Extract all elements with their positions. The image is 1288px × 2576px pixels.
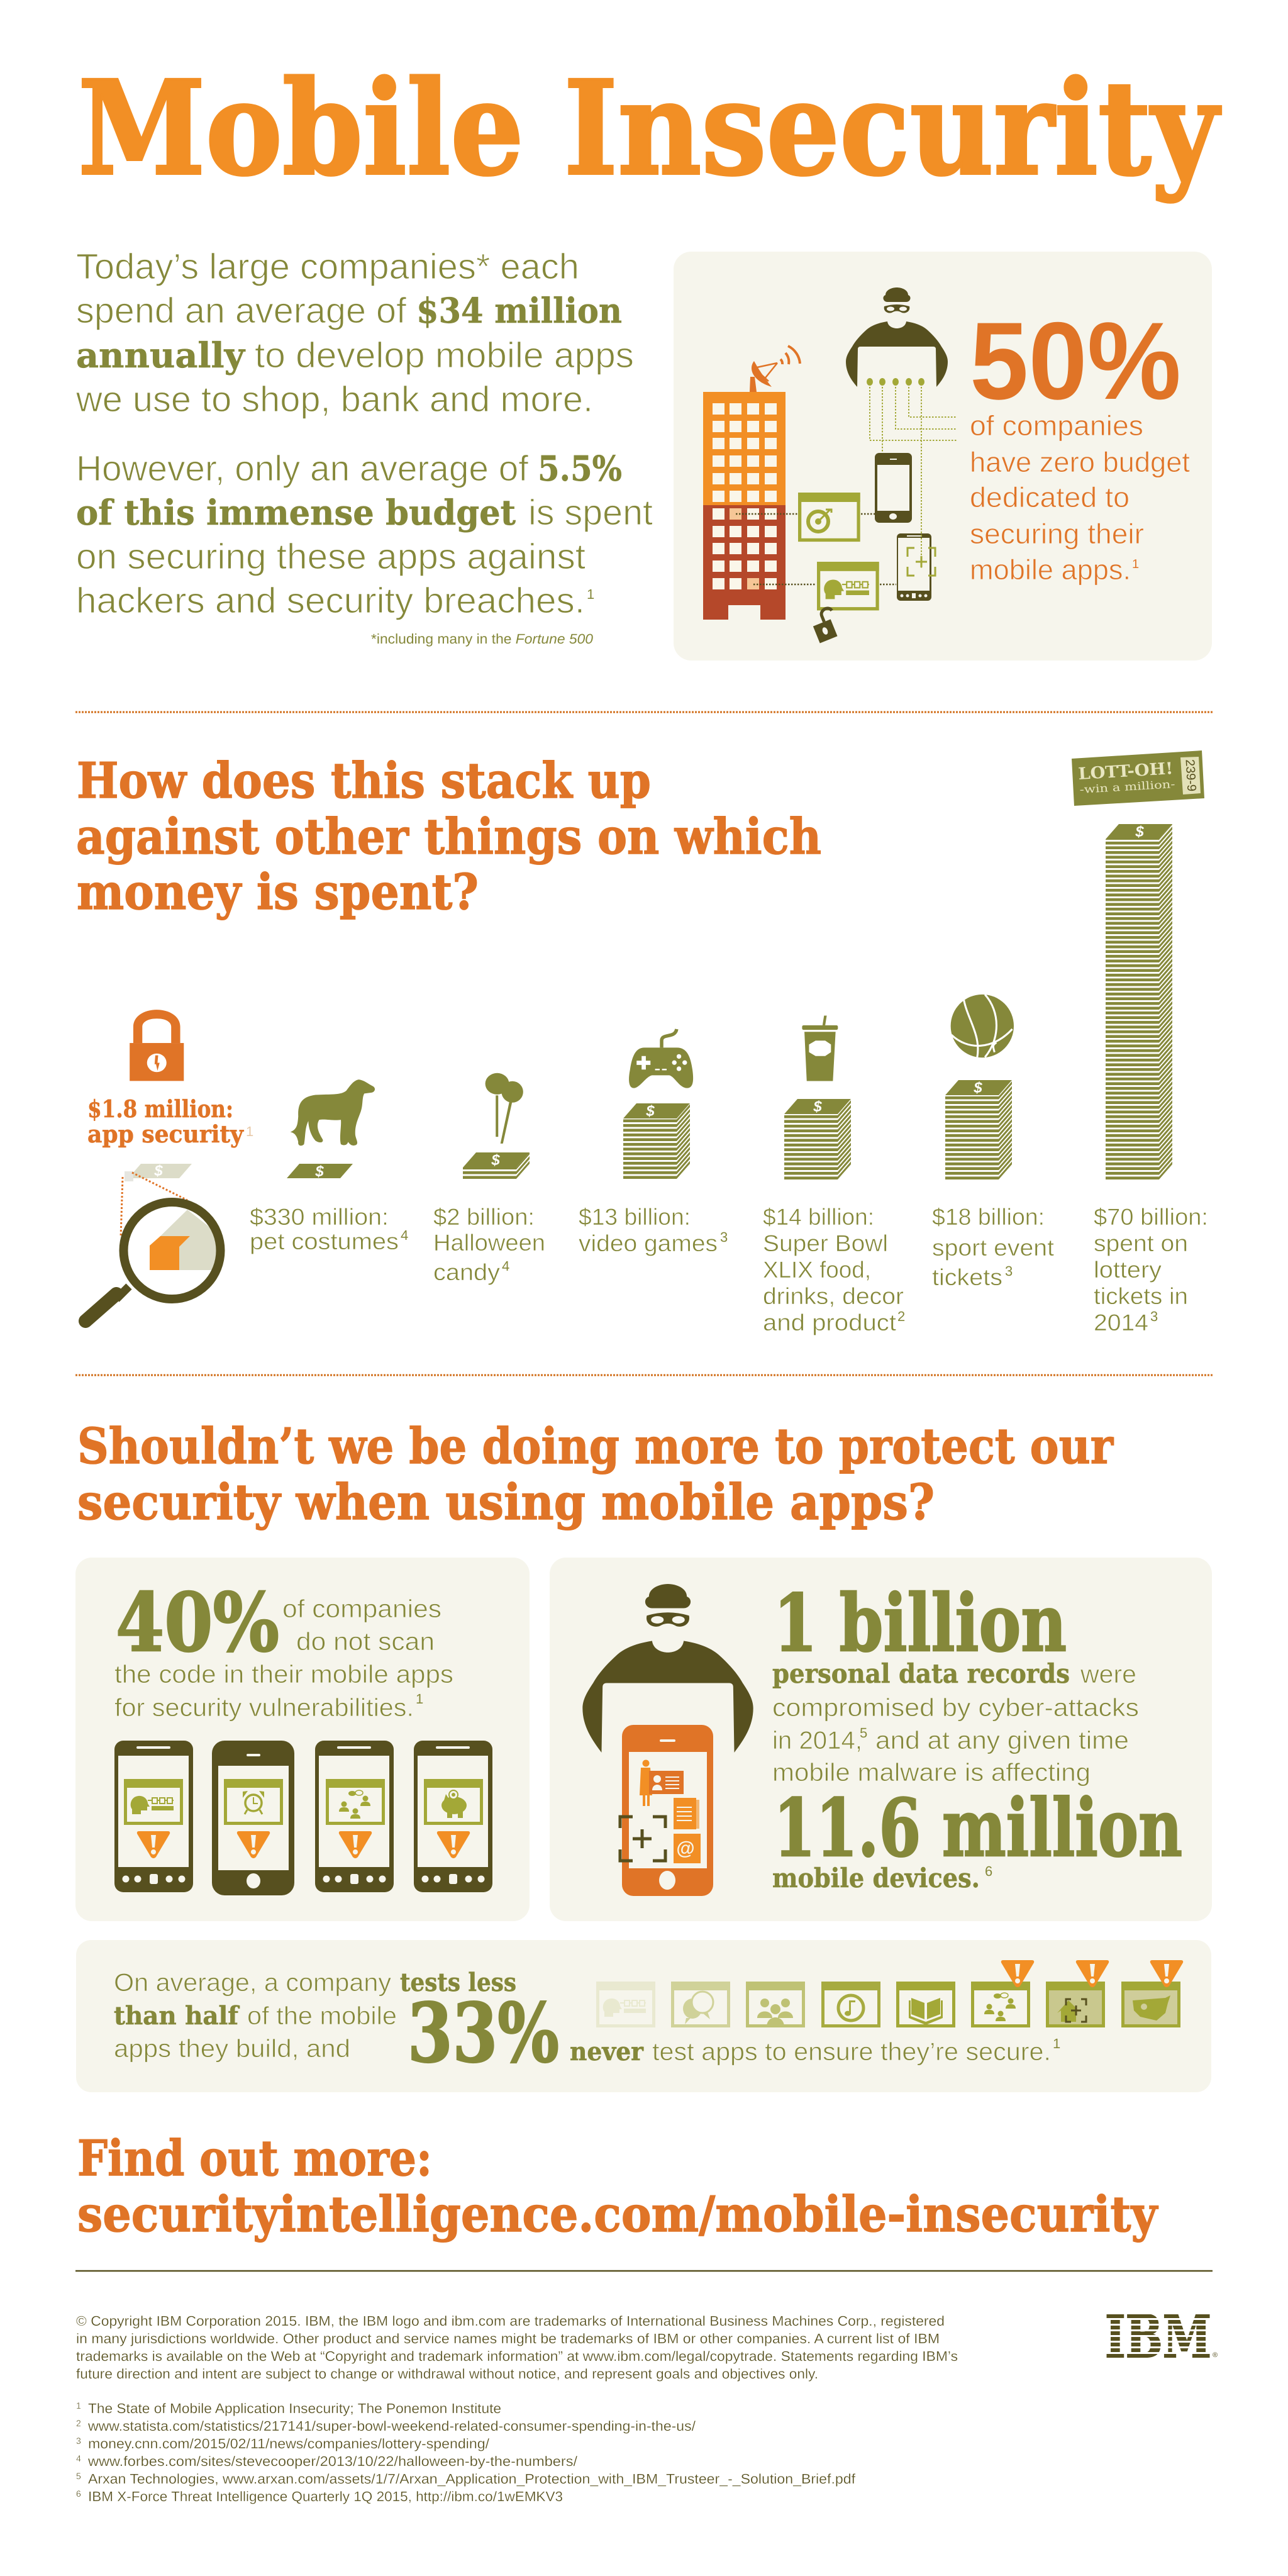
icon: super bowl bill stack: $ — [813, 1098, 822, 1115]
icon: game controller — [629, 1029, 693, 1088]
icon: lottery bill stack: $ — [1135, 823, 1144, 840]
text: zero budget description: 1 — [1132, 557, 1139, 571]
label: super bowl: 2 — [897, 1308, 905, 1324]
label: lottery tickets: lottery — [1094, 1257, 1162, 1283]
stat: 50%: 50% — [970, 300, 1181, 423]
heading: protect our security — [77, 1418, 1114, 1531]
icon: padlock — [130, 1010, 184, 1081]
icon: book app — [896, 1982, 955, 2026]
source footnotes: 3 — [76, 2436, 81, 2446]
text: code scanning description: do not scan — [296, 1628, 435, 1656]
label: lottery tickets: 2014 — [1094, 1310, 1148, 1335]
icon: orange phone with stolen data: @ — [676, 1838, 695, 1859]
text: never test apps: test apps to ensure they’re secure. — [652, 2038, 1051, 2066]
label: pet costumes: pet costumes — [250, 1229, 399, 1254]
text: code scanning description: the code in their mobile apps — [114, 1661, 453, 1688]
text: tests less than half — [114, 1968, 516, 2063]
stat: 33%: 33% — [408, 1986, 559, 2081]
icon: warning 3 — [1150, 1960, 1183, 1987]
label: sport event tickets: 3 — [1005, 1263, 1013, 1279]
text: records compromised: in 2014, — [772, 1727, 862, 1754]
label: super bowl: $14 billion: — [763, 1204, 874, 1230]
text: never test apps: never — [570, 2037, 644, 2066]
label: lottery tickets: spent on — [1094, 1230, 1188, 1256]
copyright text: © Copyright IBM Corporation 2015. IBM, the IBM logo and ibm.com are trademarks of International Business Machines Corp., registered — [76, 2313, 945, 2329]
icon: chat app — [671, 1982, 730, 2026]
icon: group app — [746, 1982, 805, 2027]
text: zero budget description: mobile apps. — [970, 554, 1131, 586]
stat: 40%: 40% — [116, 1576, 279, 1670]
icon: small bill stack: $ — [491, 1152, 500, 1169]
label: lottery tickets — [1094, 1204, 1208, 1335]
label: video games: video games — [579, 1230, 718, 1256]
text: tests less than half: than half — [114, 2001, 240, 2031]
label: super bowl: Super Bowl — [763, 1230, 888, 1256]
call to action: find out more — [77, 2130, 1158, 2243]
icon: video games bill stack — [623, 1103, 690, 1179]
intro text: security share of budget: 5.5% — [538, 448, 622, 489]
copyright text: trademarks is available on the Web at “Copyright and trademark information” at www.ibm.com/legal/copytrade. Statements regarding IBM’s — [76, 2348, 958, 2364]
icon: id app — [596, 1982, 655, 2026]
icon: office building with antenna — [703, 346, 800, 620]
icon: target app window — [798, 493, 860, 540]
icon: dog — [291, 1079, 375, 1146]
text: records compromised: 5 — [860, 1725, 867, 1741]
copyright text: future direction and intent are subject to change or withdrawal without notice, and represent goals and objectives only. — [76, 2366, 818, 2382]
icon: phone with piggy bank app warning — [414, 1741, 492, 1892]
label: halloween candy: candy — [433, 1259, 501, 1285]
text: zero budget description: of companies — [970, 410, 1143, 442]
icon: soda cup — [802, 1016, 838, 1081]
panel: 50 percent zero budget — [674, 252, 1212, 661]
label: app security amount — [87, 1095, 253, 1148]
label: sport event tickets: tickets — [932, 1264, 1002, 1290]
text: code scanning description: 1 — [416, 1691, 423, 1707]
label: pet costumes: $330 million: — [250, 1204, 389, 1230]
text: records compromised — [772, 1658, 1139, 1787]
icon: orange phone with stolen data — [620, 1725, 713, 1896]
heading: how does this stack up: money is spent? — [77, 864, 479, 921]
intro text: security share of budget: hackers and security breaches. — [76, 581, 585, 621]
label: video games: $13 billion: — [579, 1204, 691, 1230]
source footnotes: 6 — [76, 2489, 81, 2499]
label: lottery tickets: tickets in — [1094, 1283, 1188, 1309]
text: records compromised: were — [1080, 1661, 1136, 1688]
logo: IBM: ® — [1213, 2351, 1218, 2359]
source footnotes: money.cnn.com/2015/02/11/news/companies/lottery-spending/ — [88, 2436, 490, 2451]
label: app security amount: 1 — [246, 1124, 253, 1139]
text: tests less than half: apps they build, and — [114, 2035, 350, 2063]
label: lottery tickets: $70 billion: — [1094, 1204, 1208, 1230]
text: code scanning description: for security vulnerabilities. — [114, 1694, 414, 1722]
source footnotes: Arxan Technologies, www.arxan.com/assets/1/7/Arxan_Application_Protection_with_IBM_Trusteer_-_Solution_Brief.pdf — [88, 2471, 856, 2487]
text: zero budget description — [970, 410, 1190, 586]
label: halloween candy: Halloween — [433, 1230, 545, 1256]
icon: phone with identity app warning — [114, 1741, 193, 1892]
source footnotes: 4 — [76, 2453, 81, 2463]
copyright text: in many jurisdictions worldwide. Other product and service names might be trademarks of IBM or other companies. A current list of IBM — [76, 2331, 940, 2346]
label: video games: 3 — [720, 1229, 728, 1245]
source footnotes: The State of Mobile Application Insecurity; The Ponemon Institute — [88, 2400, 501, 2416]
intro text: security share of budget — [76, 448, 653, 621]
label: halloween candy: 4 — [502, 1258, 509, 1274]
heading: how does this stack up: How does this stack up — [77, 752, 651, 810]
icon: lottery ticket — [1072, 750, 1204, 806]
icon: lottery ticket: 239-9 — [1182, 759, 1198, 792]
icon: home scan app — [1046, 1982, 1105, 2027]
icon: warning 2 — [1076, 1960, 1109, 1987]
intro text: security share of budget: on securing these apps against — [76, 537, 586, 577]
text: code scanning description — [114, 1595, 453, 1722]
intro text: development budget: $34 million — [416, 290, 622, 331]
label: sport event tickets — [932, 1204, 1055, 1290]
icon: open padlock — [809, 607, 841, 644]
icon: small bill stack — [463, 1152, 530, 1179]
icon: lottery bill stack — [1106, 823, 1172, 1179]
intro text: security share of budget: of this immense budget — [76, 492, 516, 533]
label: halloween candy: $2 billion: — [433, 1204, 535, 1230]
icon: android phone with scan brackets — [897, 533, 935, 601]
label: super bowl: drinks, decor — [763, 1283, 904, 1309]
label: super bowl: and product — [763, 1310, 897, 1335]
icon: basketball — [951, 995, 1014, 1057]
label: lottery tickets: 3 — [1150, 1308, 1158, 1324]
intro text: development budget: Today’s large companies* each — [76, 247, 579, 287]
logo: IBM: IBM — [1105, 2302, 1211, 2371]
text: mobile devices: 6 — [985, 1863, 992, 1879]
text: zero budget description: have zero budget — [970, 446, 1190, 478]
text: records compromised: and at any given time — [875, 1727, 1129, 1754]
icon: lollipops — [486, 1073, 523, 1144]
label: pet costumes: 4 — [401, 1227, 408, 1243]
label: video games — [579, 1204, 728, 1256]
text: tests less than half: tests less — [400, 1968, 516, 1997]
icon: video games bill stack: $ — [645, 1103, 655, 1120]
source footnotes: www.forbes.com/sites/stevecooper/2013/10/22/halloween-by-the-numbers/ — [87, 2453, 578, 2469]
intro text: development budget: to develop mobile apps — [255, 335, 634, 376]
intro text: development budget: annually — [76, 335, 246, 376]
intro text: development budget: spend an average of — [76, 291, 406, 331]
intro text: security share of budget: However, only an average of — [76, 449, 528, 489]
icon: ghost bill and magnifying glass — [86, 1163, 220, 1321]
icon: smartphone — [875, 453, 912, 523]
icon: phone with alarm app warning — [212, 1741, 294, 1895]
intro text: security share of budget: is spent — [528, 493, 653, 533]
icon: music app — [821, 1982, 880, 2026]
text: zero budget description: securing their — [970, 518, 1144, 550]
stat: 1 billion: 1 billion — [774, 1578, 1067, 1670]
text: mobile devices: mobile devices. — [772, 1863, 980, 1893]
source footnotes: www.statista.com/statistics/217141/super-bowl-weekend-related-consumer-spending-in-the-us/ — [87, 2418, 696, 2434]
icon: hacker — [582, 1584, 753, 1753]
text: zero budget description: dedicated to — [970, 481, 1130, 513]
heading: how does this stack up — [76, 752, 821, 921]
source footnotes: 1 — [76, 2400, 81, 2411]
panel: 33 percent never test — [76, 1940, 1211, 2092]
heading: protect our security: security when using mobile apps? — [77, 1474, 935, 1531]
label: super bowl — [763, 1204, 905, 1335]
source footnotes: IBM X-Force Threat Intelligence Quarterly 1Q 2015, http://ibm.co/1wEMKV3 — [88, 2489, 563, 2504]
text: code scanning description: of companies — [282, 1595, 441, 1623]
panel: 40 percent do not scan — [75, 1558, 530, 1921]
label: halloween candy — [433, 1204, 545, 1285]
icon: single bill: $ — [314, 1163, 324, 1180]
text: tests less than half: On average, a company — [114, 1969, 391, 1997]
intro text: development budget: we use to shop, bank and more. — [75, 379, 593, 420]
icon: sport tickets bill stack — [945, 1079, 1012, 1179]
icon: single bill — [287, 1163, 353, 1180]
icon: hacker with laptop — [846, 287, 948, 387]
call to action: find out more: securityintelligence.com/mobile-insecurity — [77, 2186, 1158, 2243]
label: app security amount: $1.8 million: — [87, 1095, 233, 1123]
label: pet costumes — [250, 1204, 408, 1254]
text: records compromised: personal data records — [772, 1658, 1070, 1689]
text: records compromised: mobile malware is affecting — [772, 1759, 1091, 1787]
icon: phone with social app warning — [315, 1741, 394, 1892]
panel: 1 billion records — [550, 1558, 1212, 1921]
label: sport event tickets: sport event — [932, 1235, 1055, 1261]
source footnotes: 5 — [76, 2471, 81, 2481]
label: app security amount: app security — [87, 1120, 244, 1148]
call to action: find out more: Find out more: — [77, 2130, 432, 2187]
footnote: fortune 500: *including many in the Fortune 500 — [371, 631, 594, 647]
label: sport event tickets: $18 billion: — [932, 1204, 1045, 1230]
copyright text — [76, 2313, 958, 2382]
icon: ghost bill and magnifying glass: $ — [153, 1163, 163, 1179]
icon: identity app window — [817, 562, 879, 609]
text: records compromised: compromised by cyber-attacks — [772, 1694, 1139, 1722]
icon row: app windows fading in — [596, 1960, 1183, 2027]
intro text: security share of budget: 1 — [587, 586, 594, 602]
intro text: development budget — [75, 247, 634, 420]
text: tests less than half: of the mobile — [247, 2002, 397, 2030]
icon: warning 1 — [1001, 1960, 1034, 1987]
source footnotes — [76, 2400, 856, 2504]
heading: protect our security: Shouldn’t we be doing more to protect our — [77, 1418, 1114, 1475]
icon: social app — [971, 1982, 1030, 2026]
icon: super bowl bill stack — [784, 1098, 851, 1179]
icon: lottery ticket: LOTT-OH! — [1078, 759, 1174, 784]
text: never test apps: 1 — [1053, 2036, 1060, 2051]
connector dots and dotted lines — [736, 378, 957, 584]
icon: sport tickets bill stack: $ — [973, 1079, 982, 1096]
icon: lottery ticket: -win a million- — [1079, 778, 1175, 796]
icon: map app — [1121, 1982, 1180, 2027]
heading: how does this stack up: against other things on which — [76, 808, 821, 866]
label: super bowl: XLIX food, — [763, 1257, 871, 1283]
source footnotes: 2 — [76, 2418, 81, 2428]
